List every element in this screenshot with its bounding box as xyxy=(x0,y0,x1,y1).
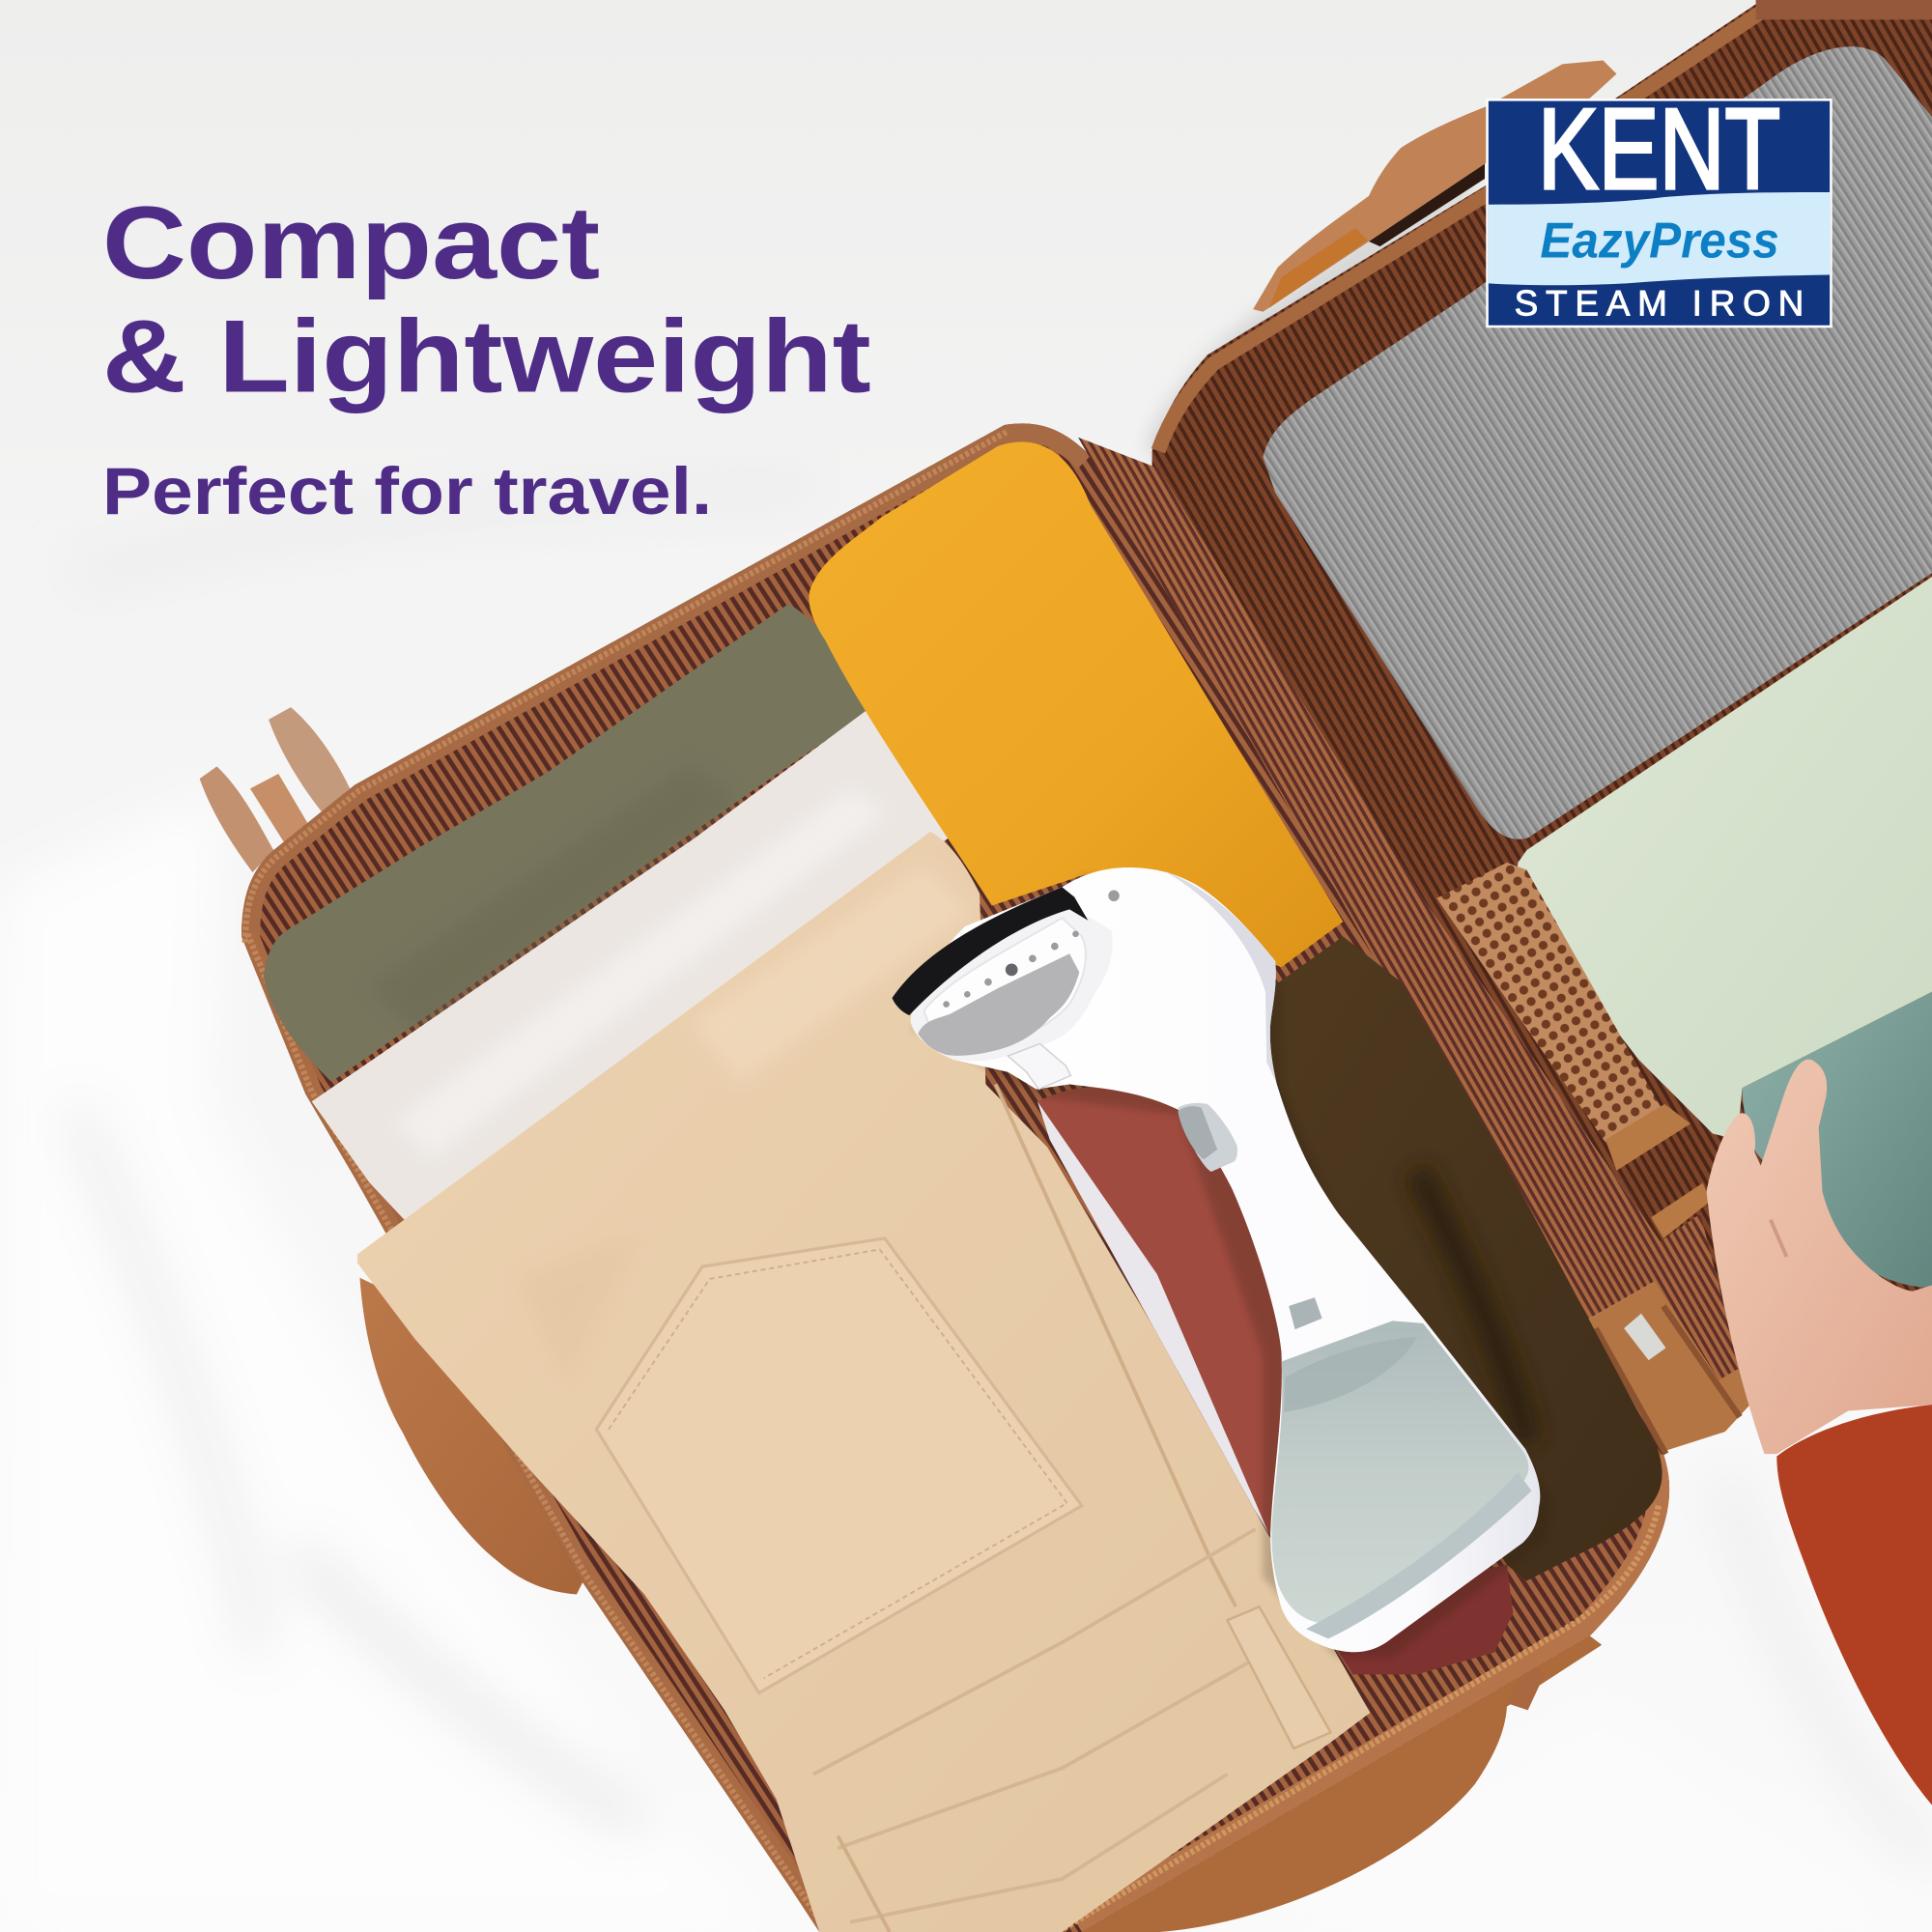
steam head plate xyxy=(924,918,1086,1050)
bristle brush xyxy=(892,887,1088,1015)
water tank xyxy=(1271,1321,1528,1624)
garment: teal folded top xyxy=(1743,992,1932,1288)
steam holes xyxy=(943,891,1120,1008)
title: Compact xyxy=(102,185,600,300)
steam button xyxy=(1178,1103,1237,1172)
garment: beige chinos xyxy=(357,832,1370,1932)
suitcase: zip and webbing below panel xyxy=(1580,1213,1756,1454)
suitcase: striped centre lining panel xyxy=(1078,438,1678,1323)
suitcase: top straps xyxy=(1253,60,1616,312)
product: handheld garment steamer xyxy=(892,867,1552,1658)
logo: KENT EazyPress Steam Iron: EazyPress xyxy=(1540,213,1779,270)
hand packing clothes xyxy=(1707,1060,1932,1454)
garment: cream white fabric xyxy=(312,702,949,1222)
chinos pocket xyxy=(596,1238,1082,1693)
shadow near lid xyxy=(1146,160,1479,469)
suitcase: base compartment xyxy=(242,423,1669,1932)
steamer shadow xyxy=(912,875,1552,1658)
title: & Lightweight xyxy=(102,298,871,414)
logo: KENT EazyPress Steam Iron: STEAM IRON xyxy=(1515,284,1804,324)
zip slider xyxy=(1624,1314,1665,1360)
red sleeve xyxy=(1776,1405,1932,1805)
logo: KENT EazyPress Steam Iron xyxy=(1486,86,1833,327)
fabric pad xyxy=(918,953,1079,1056)
lock tab xyxy=(1289,1297,1322,1329)
lavender sheet visible beside red fabric xyxy=(1037,1101,1269,1534)
title xyxy=(102,185,871,414)
garment: yellow rolled top xyxy=(809,441,1343,967)
suitcase handle: left tag xyxy=(200,707,350,872)
logo: KENT EazyPress Steam Iron: KENT xyxy=(1538,86,1780,213)
garment: terracotta fabric xyxy=(1037,1087,1513,1674)
garment: grey knit sweater xyxy=(1263,46,1932,839)
subtitle: Perfect for travel. xyxy=(102,454,712,528)
steam head collar xyxy=(911,906,1113,1062)
garment: pale green knit xyxy=(1518,577,1932,1140)
mesh pocket xyxy=(1436,863,1710,1238)
steamer body xyxy=(911,867,1540,1652)
garment: dark brown fabric xyxy=(1257,936,1662,1580)
shoulder shade xyxy=(1164,871,1276,1083)
suitcase: open lid xyxy=(1152,0,1932,1405)
garment: olive fabric xyxy=(264,604,877,1082)
head clip xyxy=(1008,1043,1070,1090)
suitcase: leather side bumpers xyxy=(359,1278,1602,1932)
